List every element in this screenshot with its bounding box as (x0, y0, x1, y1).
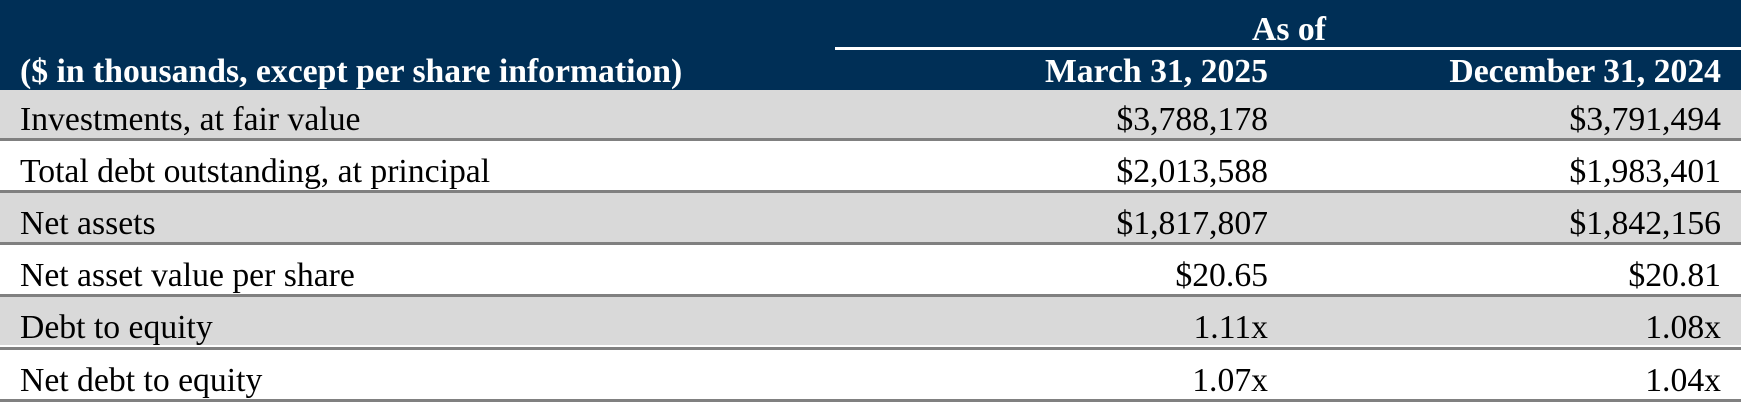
heading: March 31, 2025: March 31, 2025 (1045, 53, 1268, 90)
row: net debt to equity: Net debt to equity (20, 362, 262, 399)
row: net assets: $1,817,807 (1116, 205, 1268, 242)
row: total debt outstanding: $2,013,588 (1116, 153, 1268, 190)
header rule (835, 47, 1741, 50)
row: net asset value per share: Net asset value per share (20, 257, 355, 294)
row: debt to equity: 1.11x (1193, 309, 1268, 346)
row: debt to equity (0, 297, 1741, 350)
row: debt to equity: 1.08x (1645, 309, 1721, 346)
row: debt to equity: Debt to equity (20, 309, 213, 346)
row: net debt to equity: 1.04x (1645, 362, 1721, 399)
row: investments at fair value: $3,788,178 (1116, 101, 1268, 138)
row: investments at fair value (0, 90, 1741, 141)
row: net debt to equity: 1.07x (1192, 362, 1268, 399)
heading: December 31, 2024: December 31, 2024 (1449, 53, 1721, 90)
row: net assets (0, 193, 1741, 245)
row: investments at fair value: $3,791,494 (1569, 101, 1721, 138)
row: total debt outstanding: Total debt outstanding, at principal (20, 153, 490, 190)
row: net assets: Net assets (20, 205, 156, 242)
heading: units note: ($ in thousands, except per share information) (20, 53, 682, 90)
row: net asset value per share (0, 257, 1741, 297)
table header (0, 0, 1741, 90)
row: total debt outstanding (0, 153, 1741, 193)
row: net asset value per share: $20.81 (1628, 257, 1721, 294)
row: net asset value per share: $20.65 (1175, 257, 1268, 294)
row: net assets: $1,842,156 (1569, 205, 1721, 242)
row: net debt to equity (0, 362, 1741, 402)
row: total debt outstanding: $1,983,401 (1569, 153, 1721, 190)
row: investments at fair value: Investments, at fair value (20, 101, 360, 138)
heading: As of: As of (1252, 11, 1327, 48)
